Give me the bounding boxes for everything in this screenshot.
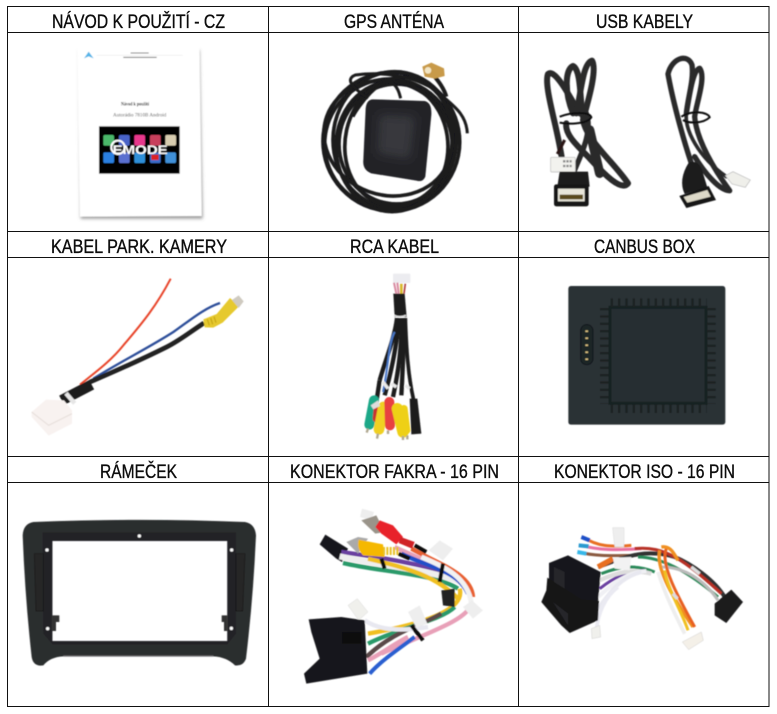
image: parking camera cable: [32, 279, 244, 436]
image: manual booklet: Návod k použití: [121, 102, 149, 108]
heading: canbus box: CANBUS BOX: [594, 237, 695, 258]
panel: návod k použití: [52, 11, 225, 219]
image: manual booklet: [77, 45, 203, 219]
heading: rca kabel: RCA KABEL: [350, 237, 439, 258]
image: manual booklet: EMODE: [113, 143, 168, 157]
heading: gps anténa: GPS ANTÉNA: [344, 12, 444, 33]
image: gps antenna with coiled cable: [308, 62, 471, 222]
image: rca cable bundle: [367, 274, 421, 440]
image: dash frame: [23, 520, 256, 666]
panel: canbus box: [568, 237, 725, 425]
panel: konektor iso: [541, 462, 743, 650]
panel: gps anténa: [308, 12, 471, 222]
panel: usb kabely: [547, 12, 750, 208]
heading: konektor iso: KONEKTOR ISO - 16 PIN: [554, 462, 735, 483]
panel: rca kabel: [350, 237, 439, 440]
image: iso harness: [541, 528, 743, 650]
panel: rámeček: [23, 461, 256, 666]
heading: usb kabely: USB KABELY: [596, 12, 693, 33]
panel: kabel park. kamery: [32, 237, 244, 436]
panel: konektor fakra: [290, 462, 499, 684]
heading: kabel park. kamery: KABEL PARK. KAMERY: [51, 237, 227, 258]
heading: návod k použití: NÁVOD K POUŽITÍ - CZ: [52, 11, 225, 33]
image: fakra harness: [304, 509, 483, 684]
heading: rámeček: RÁMEČEK: [100, 461, 177, 483]
image: two usb cables: [547, 58, 750, 208]
left usb cable: [547, 61, 628, 206]
connector pins: [581, 325, 593, 365]
image: manual booklet: Autorádio 7810B Android: [113, 113, 167, 119]
right usb cable: [668, 58, 750, 208]
image: canbus module: [568, 286, 725, 425]
heading: konektor fakra: KONEKTOR FAKRA - 16 PIN: [290, 462, 499, 483]
